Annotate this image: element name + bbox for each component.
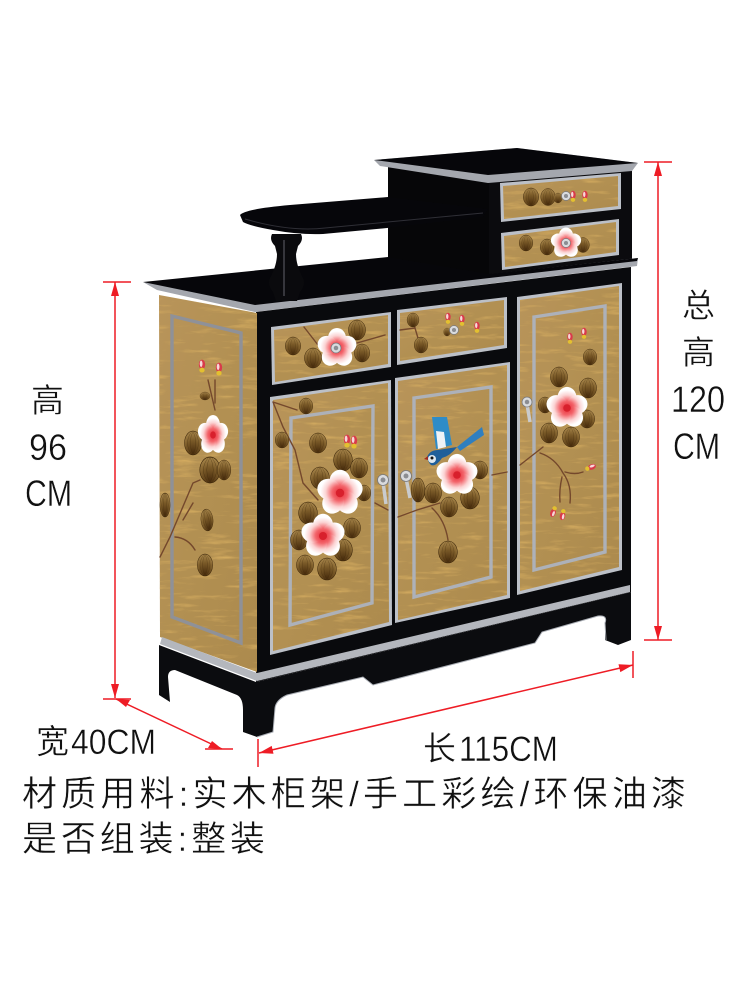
cabinet illustration <box>143 148 638 737</box>
handle middle <box>400 470 412 498</box>
dimension: total height 120cm: 120 <box>671 379 725 420</box>
dimension: height 96cm <box>25 282 131 699</box>
handle right <box>522 397 532 422</box>
dimension: length 115cm: 115CM <box>459 730 558 769</box>
upper drawer one <box>500 173 621 222</box>
middle door <box>395 362 510 623</box>
left door <box>270 380 392 655</box>
dimension: total height 120cm: 高 <box>682 334 715 371</box>
black front <box>256 267 631 682</box>
dimension: width 40cm: 宽 <box>36 723 69 760</box>
drawer left <box>271 312 391 385</box>
dimension: total height 120cm: 总 <box>682 287 715 324</box>
dimension: height 96cm: 96 <box>29 427 67 468</box>
material text: 材质用料:实木柜架/手工彩绘/环保油漆 <box>22 775 686 814</box>
upper unit <box>374 148 638 278</box>
round shelf with turned column <box>240 197 488 301</box>
handle left <box>378 474 388 504</box>
upper drawer two <box>501 219 619 270</box>
main top <box>143 257 638 312</box>
dimension: width 40cm <box>36 699 233 762</box>
dimension: length 115cm <box>258 651 633 769</box>
drawer right <box>397 297 507 365</box>
gold side panel <box>159 295 257 672</box>
assembly text: 是否组装:整装 <box>22 820 265 859</box>
bird <box>424 417 484 465</box>
dimension: height 96cm: CM <box>25 473 72 514</box>
dimension: total height 120cm <box>644 162 725 640</box>
right door <box>517 283 622 595</box>
dimension: height 96cm: 高 <box>31 382 64 419</box>
drawers <box>271 297 507 385</box>
dimension: total height 120cm: CM <box>673 426 720 467</box>
base <box>159 585 631 737</box>
dimension: width 40cm: 40CM <box>71 723 156 762</box>
dimension: length 115cm: 长 <box>423 730 456 767</box>
